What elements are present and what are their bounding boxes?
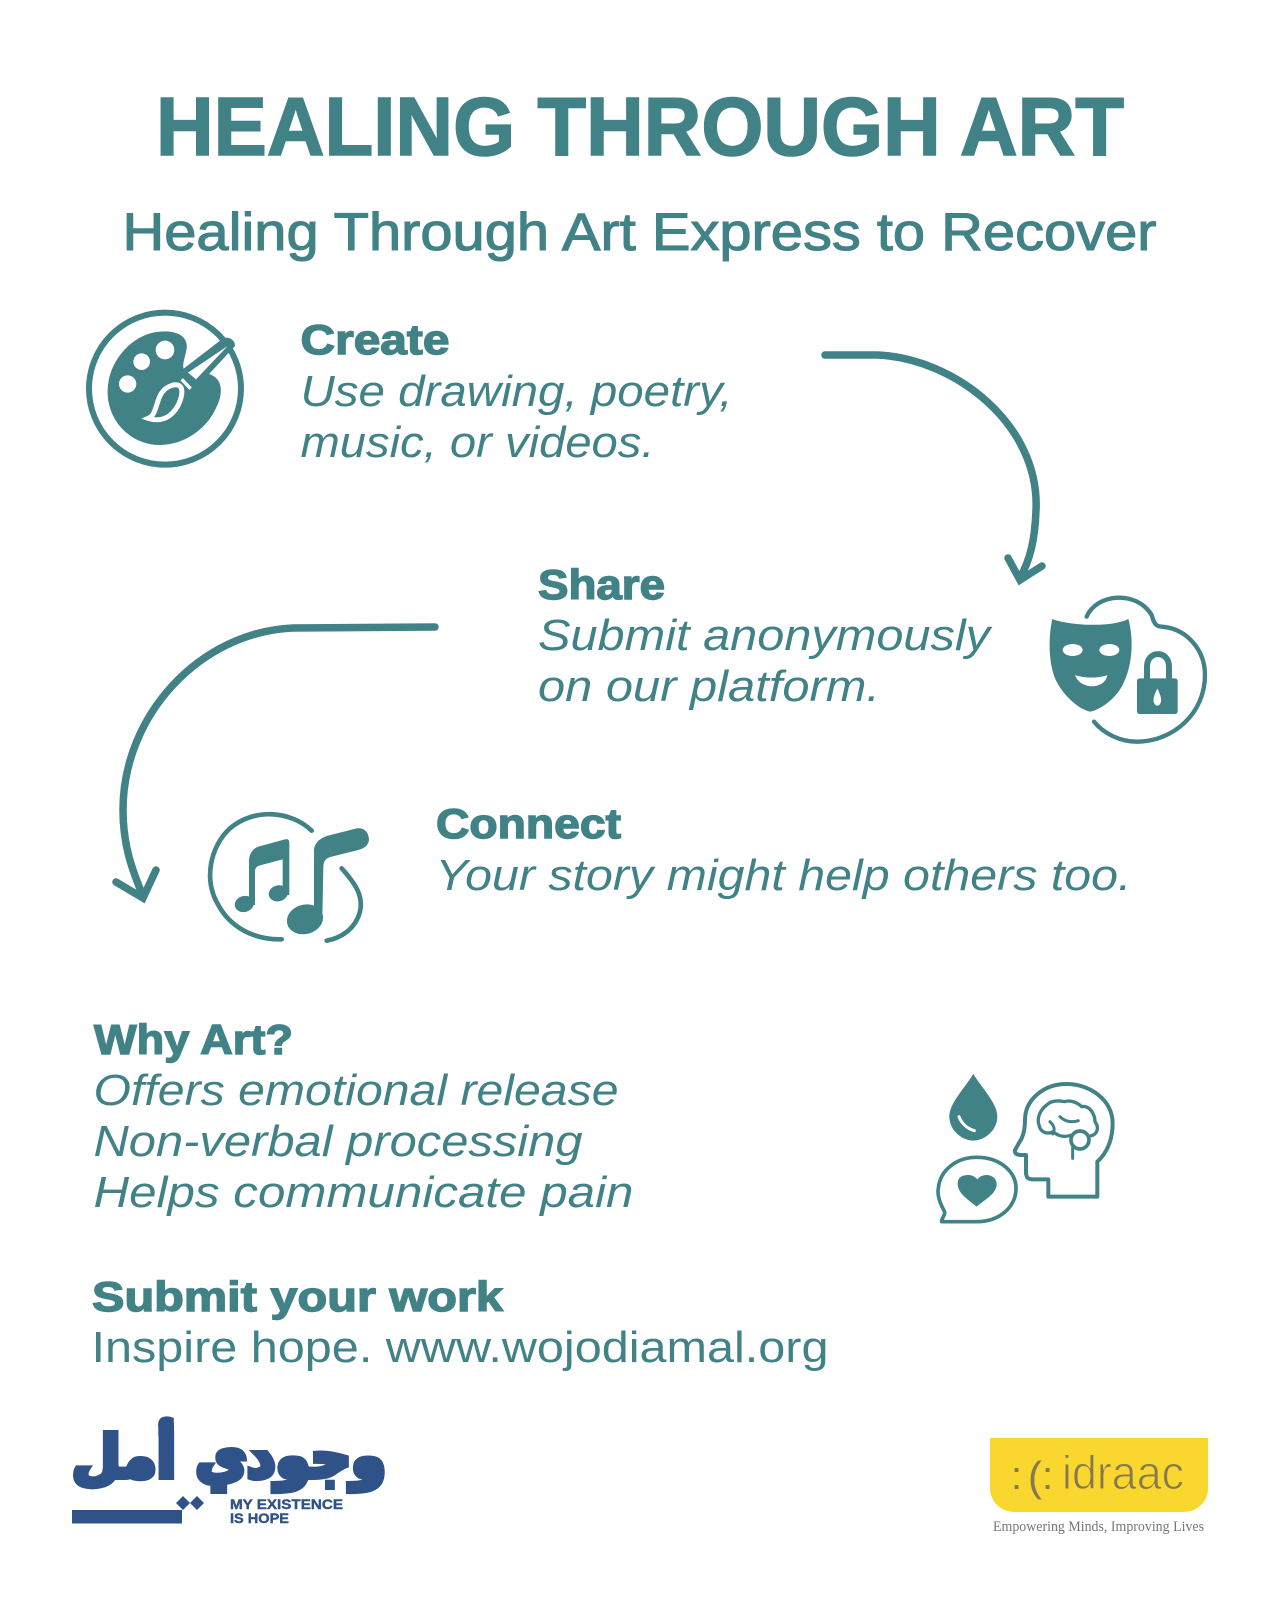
why art block: Helps communicate pain bbox=[94, 1168, 634, 1217]
step: create: Use drawing, poetry, bbox=[300, 367, 732, 416]
logo: wojodi amal: MY EXISTENCE bbox=[230, 1496, 343, 1512]
step: share: Submit anonymously bbox=[538, 611, 993, 660]
step: share: on our platform. bbox=[538, 662, 880, 711]
title: HEALING THROUGH ART bbox=[156, 80, 1124, 173]
why art block bbox=[94, 1016, 634, 1217]
logo: idraac: : bbox=[1042, 1454, 1053, 1498]
logo: idraac: : bbox=[1011, 1454, 1022, 1498]
step: share: Share bbox=[538, 561, 665, 608]
why art block: Why Art? bbox=[94, 1016, 293, 1063]
why art block: Offers emotional release bbox=[94, 1066, 618, 1115]
icon: drop, heart bubble and head with brain bbox=[938, 1074, 1113, 1222]
icon: theatre mask and lock in cloud bbox=[1050, 598, 1205, 742]
logo: idraac: Empowering Minds, Improving Lives bbox=[993, 1519, 1204, 1535]
logo: idraac: ( bbox=[1028, 1453, 1042, 1500]
logo: idraac bbox=[990, 1438, 1208, 1535]
call to action bbox=[92, 1273, 828, 1372]
step: connect: Connect bbox=[436, 800, 621, 847]
icon: music notes bbox=[210, 814, 369, 941]
call to action: Inspire hope. www.wojodiamal.org bbox=[92, 1323, 828, 1372]
logo: wojodi amal: IS HOPE bbox=[230, 1510, 289, 1526]
arrow: share to connect bbox=[116, 627, 435, 898]
step: create: Create bbox=[300, 316, 450, 363]
icon: palette and brush bbox=[89, 313, 241, 465]
call to action: Submit your work bbox=[92, 1273, 504, 1320]
logo: wojodi amal bbox=[72, 1419, 386, 1526]
step: connect: Your story might help others too. bbox=[436, 851, 1132, 900]
logo: idraac: idraac bbox=[1062, 1446, 1184, 1499]
step: connect bbox=[436, 800, 1132, 900]
arrow: create to share bbox=[825, 355, 1042, 580]
why art block: Non-verbal processing bbox=[94, 1117, 583, 1166]
step: create: music, or videos. bbox=[300, 418, 654, 467]
subtitle: Healing Through Art Express to Recover bbox=[122, 203, 1156, 262]
logo: wojodi amal: وجودي أمل bbox=[72, 1419, 386, 1492]
step: create bbox=[300, 316, 732, 467]
step: share bbox=[538, 561, 993, 711]
